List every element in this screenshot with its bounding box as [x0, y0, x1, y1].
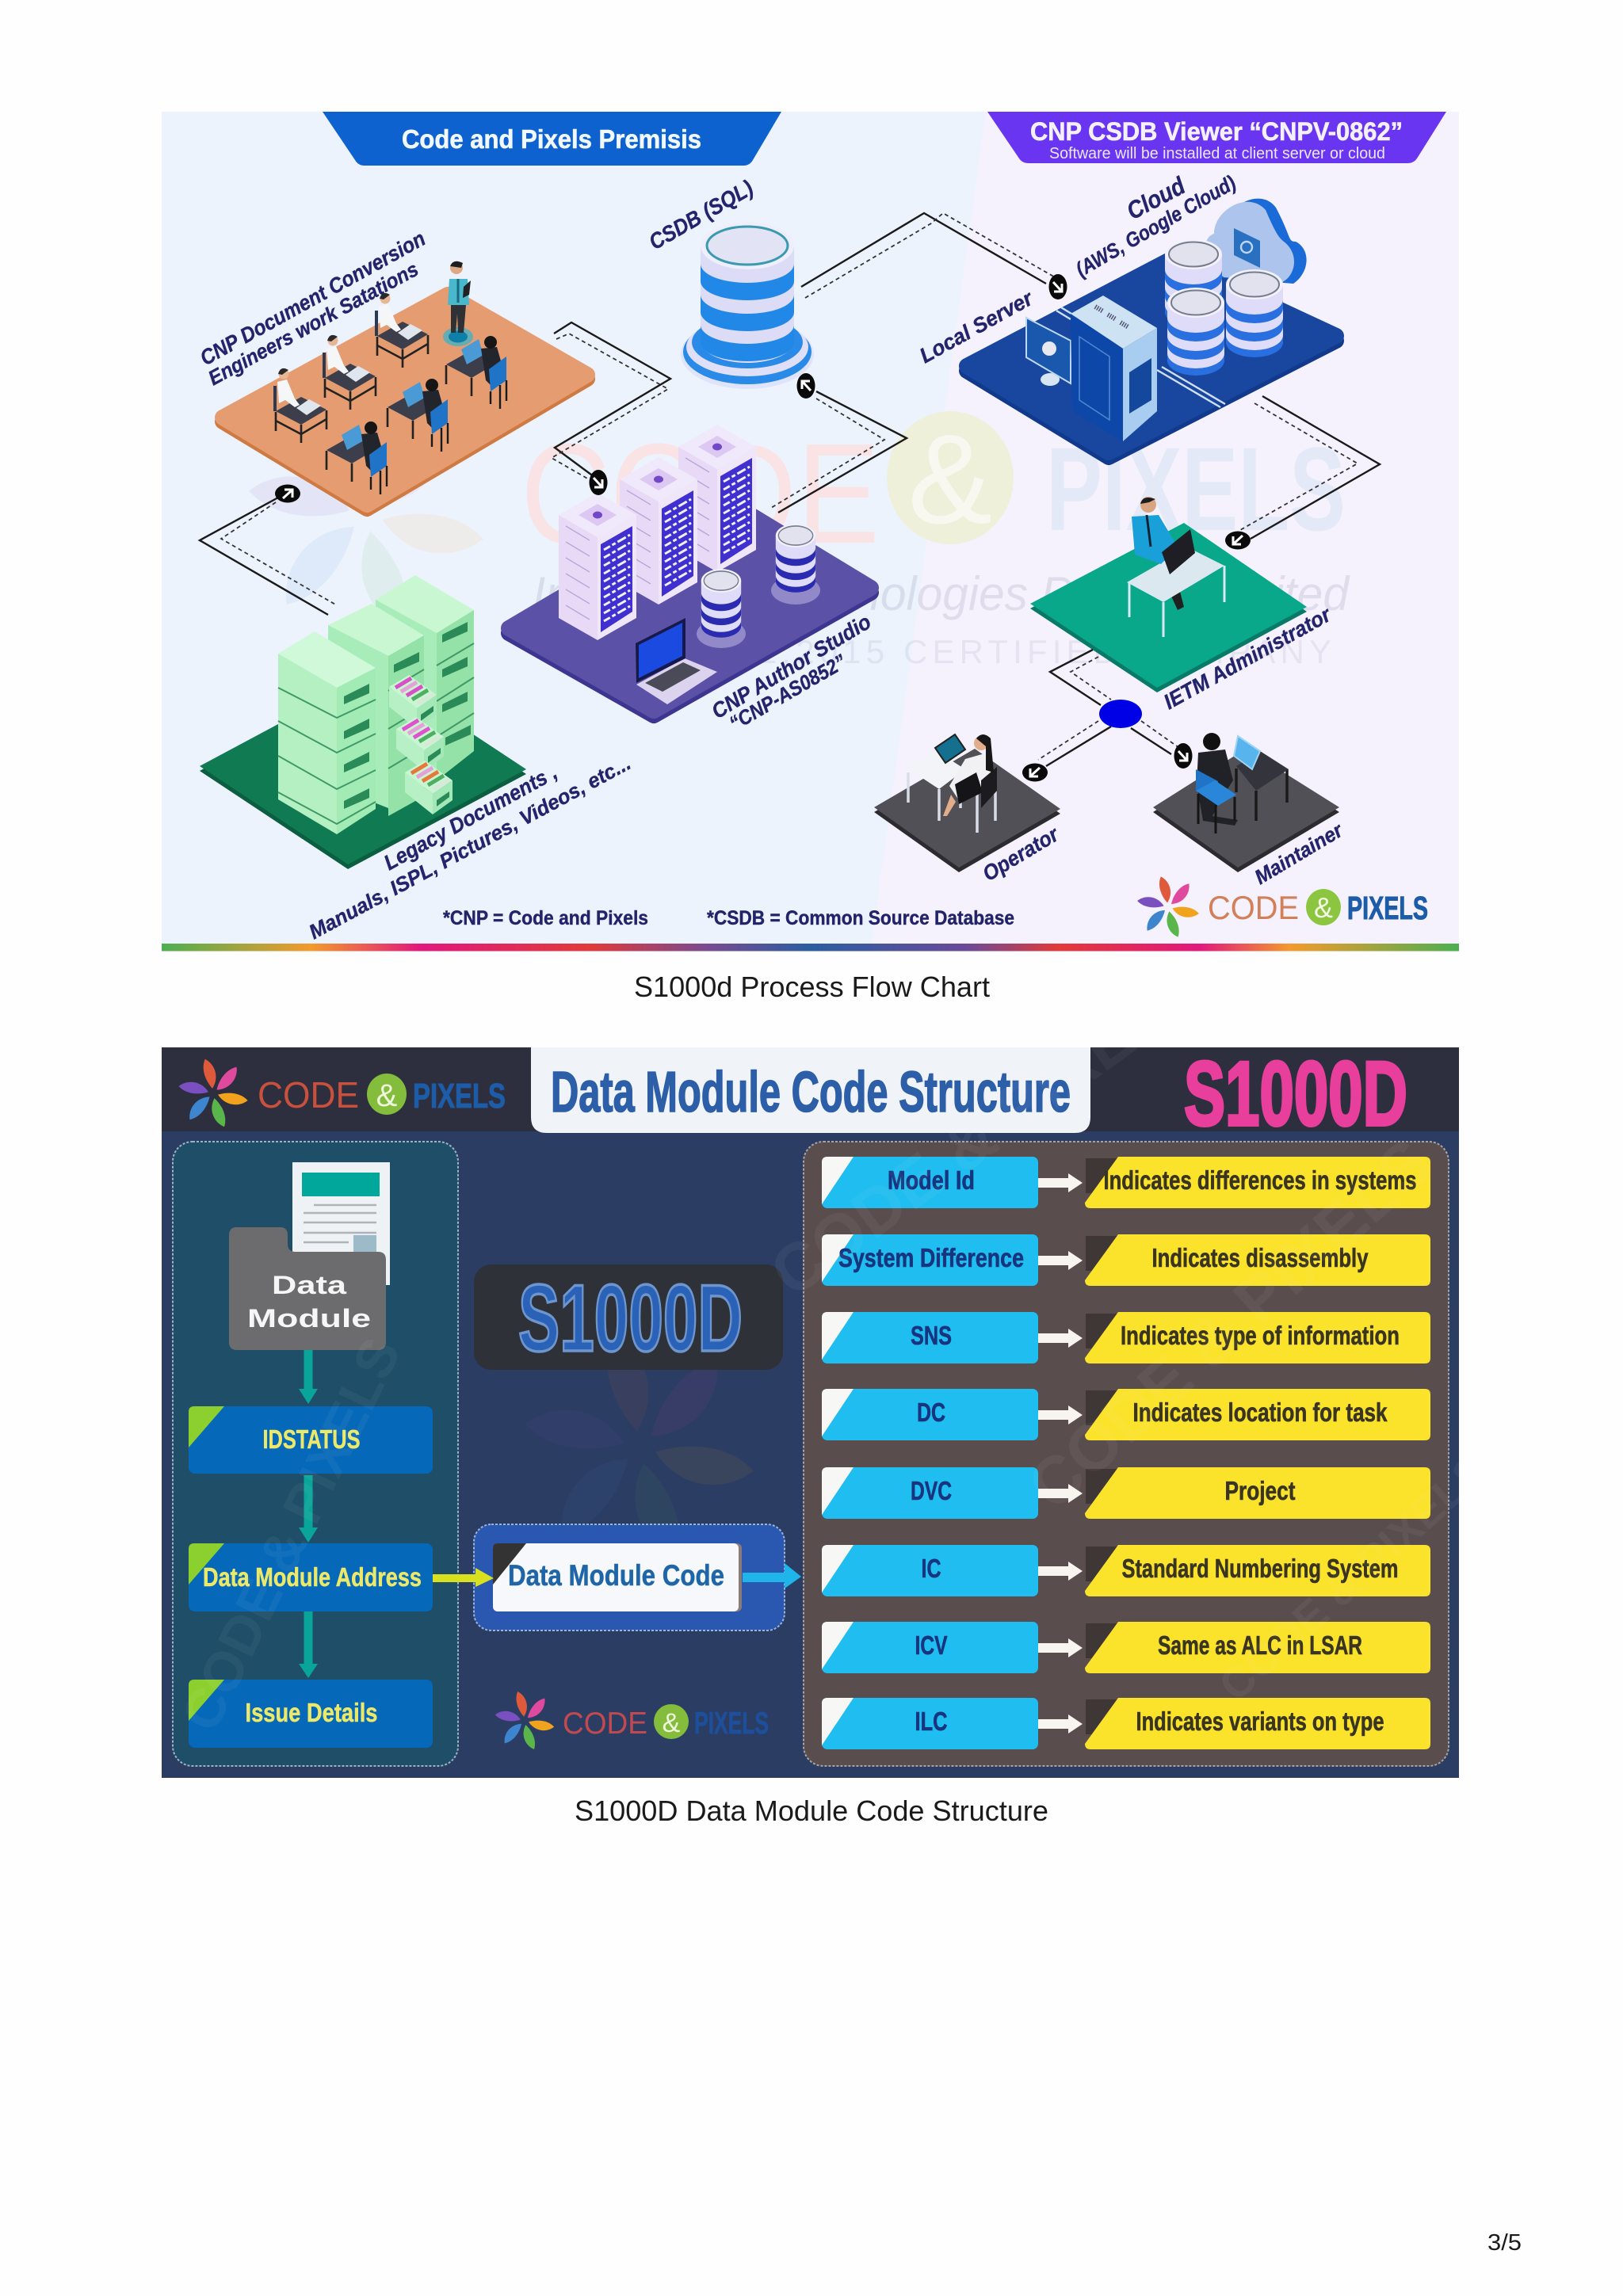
watermark: Code and Pixels: &: [908, 408, 992, 550]
label: CNP Document Conversion: CNP Document Conversion: [196, 227, 430, 370]
icon: database stacks: [1165, 239, 1283, 376]
box: Data Module Address: [189, 1543, 433, 1611]
row: ILC: [822, 1698, 1430, 1749]
logo: Code and Pixels: PIXELS: [1347, 890, 1428, 926]
server plate: local server and cloud: [967, 199, 1336, 457]
label: Local Server: Local Server: [915, 286, 1037, 368]
green plate: legacy documents: [200, 575, 526, 869]
connector: administrator to operator and maintainer: [1022, 650, 1192, 781]
row: Model Id: [822, 1157, 1430, 1208]
connector: author studio to CSDB: [771, 373, 907, 513]
icon: code server towers: [559, 425, 756, 640]
header: Code and Pixels Premisis: [323, 112, 781, 166]
watermark pinwheel: [523, 1334, 756, 1561]
maintainer plate: [1153, 733, 1339, 872]
label: Maintainer: Maintainer: [1251, 818, 1348, 889]
label: IETM Administrator: IETM Administrator: [1159, 602, 1336, 714]
header: Code and Pixels Premisis: Code and Pixels Premisis: [402, 124, 701, 154]
icons: engineers at desks: [275, 293, 506, 494]
workstations plate: [223, 261, 587, 509]
row: Model Id: Indicates differences in systems: [1103, 1165, 1417, 1195]
panel: code element list: [804, 1142, 1449, 1766]
box: IDSTATUS: IDSTATUS: [263, 1425, 360, 1454]
header: CNP CSDB Viewer: Software will be installed at client server or cloud: [1049, 145, 1385, 162]
label: AWS, Google Cloud: (AWS, Google Cloud): [1071, 170, 1239, 281]
badge: S1000D blue: [474, 1264, 783, 1371]
caption: process flow chart: S1000d Process Flow Chart: [634, 971, 990, 1003]
panel: left flow: [173, 1142, 458, 1766]
icon: standing supervisor: [443, 261, 473, 346]
arrow: folder to IDSTATUS: [299, 1350, 318, 1404]
logo: bottom center: &: [663, 1708, 681, 1738]
box: Data Module Code: Data Module Code: [508, 1559, 724, 1592]
row: ICV: [822, 1622, 1430, 1673]
label: Engineers work Satations: Engineers work Satations: [204, 257, 422, 390]
icon: small databases: [697, 524, 820, 648]
row: DVC: [822, 1467, 1430, 1519]
footnote: CSDB: *CSDB = Common Source Database: [707, 907, 1014, 929]
rainbow footer bar: [162, 944, 1459, 951]
row: SNS: [822, 1312, 1430, 1363]
row: DC: [822, 1389, 1430, 1440]
connector: CSDB to conversion: [552, 322, 670, 495]
label: CNP Author Studio: CNP Author Studio: [708, 609, 875, 723]
footnote: CNP: *CNP = Code and Pixels: [443, 907, 648, 929]
watermark: Code and Pixels: ISO 9001:2015 CERTIFIED COMPANY: [602, 633, 1331, 670]
heading: S1000D pink: S1000D: [1184, 1043, 1407, 1145]
logo: Code and Pixels: &: [1314, 891, 1333, 924]
row: DVC: DVC: [911, 1476, 952, 1505]
panel: data module code structure: [162, 948, 1497, 1778]
database: CSDB (SQL): [681, 222, 814, 389]
row: DC: DC: [917, 1398, 945, 1427]
row: IC: IC: [921, 1554, 941, 1583]
logo: bottom center: PIXELS: [694, 1707, 769, 1741]
row: System Difference: Indicates disassembly: [1152, 1243, 1369, 1272]
arrow: code to structure list: [743, 1563, 801, 1589]
connector: server to administrator: [1225, 396, 1380, 550]
icon: local server and monitor: [1026, 296, 1157, 441]
panel: S1000d process flow chart: [162, 112, 1459, 951]
watermarks: diagonal brand marks: CODE & PIXELS: [757, 948, 1216, 1311]
arrow: IDSTATUS to address: [299, 1475, 318, 1543]
row: IC: Standard Numbering System: [1122, 1554, 1398, 1583]
icon: maintainer at desk: [1196, 733, 1289, 833]
row: System Difference: System Difference: [838, 1243, 1024, 1272]
row: System Difference: [822, 1234, 1430, 1286]
watermarks: diagonal brand marks: CODE & PIXELS: [1209, 1444, 1497, 1711]
logo: top left: PIXELS: [413, 1077, 506, 1116]
watermark: Code and Pixels: CODE: [521, 414, 880, 574]
watermark: Code and Pixels: PIXELS: [1046, 422, 1346, 555]
connector: CSDB to server: [801, 213, 1067, 299]
row: ILC: ILC: [915, 1707, 948, 1736]
label: CNP-AS0852: “CNP-AS0852”: [725, 650, 850, 735]
logo: Code and Pixels: CODE: [1208, 889, 1299, 926]
row: DVC: Project: [1225, 1476, 1296, 1505]
badge: S1000D blue: S1000D: [518, 1265, 743, 1371]
logo: bottom center: [495, 1691, 769, 1750]
label: Manuals, ISPL, Pictures, Videos: Manuals, ISPL, Pictures, Videos, etc...: [305, 751, 635, 944]
watermarks: diagonal brand marks: CODE & PIXELS: [1014, 1124, 1445, 1524]
IETM administrator plate: [1030, 497, 1307, 692]
caption: data module code structure: S1000D Data Module Code Structure: [575, 1794, 1048, 1827]
operator plate: [874, 734, 1060, 872]
box: Data Module Address: Data Module Address: [203, 1562, 422, 1592]
logo: top left: [178, 1059, 506, 1127]
watermark: Code and Pixels: Integrated Technologies Private Limited: [533, 567, 1350, 620]
icon: data module folder: Module: [247, 1304, 371, 1333]
row: IC: [822, 1545, 1430, 1596]
row: DC: Indicates location for task: [1133, 1398, 1388, 1427]
row: ICV: ICV: [915, 1630, 948, 1660]
box: Data Module Code: [474, 1524, 785, 1630]
box: Issue Details: [189, 1680, 433, 1748]
logo: top left: CODE: [258, 1074, 359, 1116]
label: Legacy Documents: Legacy Documents ,: [380, 760, 561, 875]
watermarks: diagonal brand marks: CODE & PIXELS: [169, 1328, 412, 1741]
page number: 3/5: [1487, 2230, 1522, 2256]
watermark: Code and Pixels: [246, 399, 1350, 670]
icon: data module folder: Data: [272, 1271, 346, 1299]
icon: operator at desk: [907, 734, 997, 833]
row: SNS: SNS: [911, 1321, 952, 1350]
logo: Code and Pixels: [1136, 876, 1428, 938]
title: Data Module Code Structure: Data Module Code Structure: [551, 1061, 1071, 1124]
row: Model Id: Model Id: [888, 1165, 975, 1195]
logo: bottom center: CODE: [563, 1707, 647, 1741]
icon: filing cabinets: [278, 575, 474, 834]
connector: legacy documents to engineers: [200, 485, 337, 615]
label: Operator: Operator: [979, 822, 1064, 886]
box: IDSTATUS: [189, 1406, 433, 1474]
purple plate: author studio: [509, 425, 871, 715]
row: SNS: Indicates type of information: [1121, 1321, 1400, 1350]
label: Cloud: Cloud: [1122, 171, 1190, 225]
title: Data Module Code Structure: [531, 1047, 1090, 1133]
icon: cloud: [1205, 199, 1307, 284]
watermarks: diagonal brand marks: [169, 948, 1497, 1741]
logo: top left: &: [376, 1078, 398, 1113]
icon: laptop: [636, 618, 717, 704]
icon: administrator at desk: [1127, 497, 1224, 637]
header: CNP CSDB Viewer: CNP CSDB Viewer “CNPV-0862”: [1030, 117, 1403, 146]
row: ICV: Same as ALC in LSAR: [1158, 1630, 1362, 1660]
header: CNP CSDB Viewer: [987, 112, 1446, 163]
arrow: address to issue details: [299, 1611, 318, 1678]
arrow: address to code: [433, 1568, 494, 1587]
icon: data module folder: [229, 1162, 390, 1350]
header band: [162, 1047, 1459, 1131]
row: ILC: Indicates variants on type: [1136, 1707, 1384, 1736]
box: Issue Details: Issue Details: [246, 1698, 377, 1727]
label: CSDB (SQL): CSDB (SQL): [645, 175, 757, 254]
